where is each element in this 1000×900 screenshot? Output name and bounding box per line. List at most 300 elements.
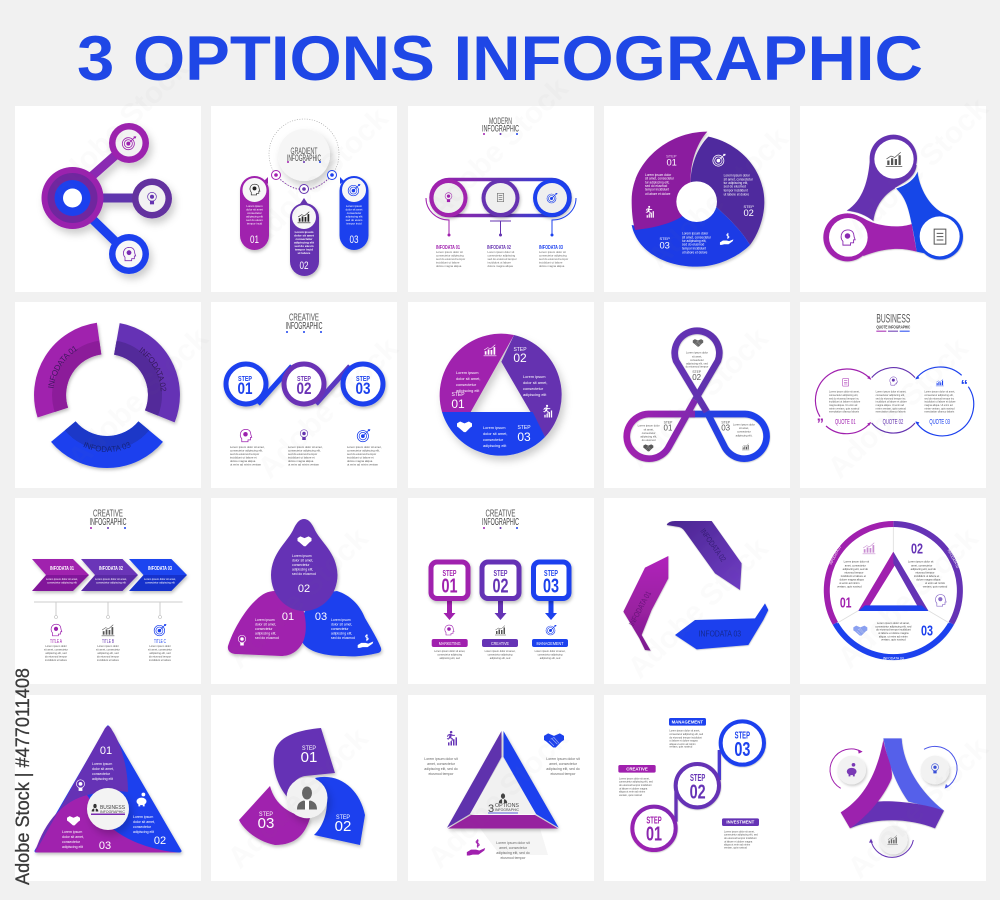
icon: target — [122, 136, 136, 150]
lorem text: consectetur adipiscing elit, sed — [669, 733, 704, 736]
panel: three blades with person — [211, 695, 397, 881]
lorem text: Lorem ipsum dolor sit amet, — [619, 777, 650, 780]
lorem text: incididunt ut labore — [436, 260, 460, 264]
lorem text: adipiscing elit, sed do — [424, 767, 458, 771]
lorem text: Lorem ipsum dolor sit amet, — [230, 445, 265, 449]
center label: INFOGRAPHIC — [100, 809, 125, 814]
icon: handshake — [853, 626, 867, 636]
panel: chevron process: Lorem ipsum dolor sit amet, — [144, 577, 176, 581]
petal text: 03 — [315, 611, 327, 623]
loop text: 02 — [692, 373, 702, 382]
central white circle: INFOGRAPHIC — [287, 153, 321, 163]
lorem text: eiusmod tempor — [550, 772, 576, 776]
loop text: consectetur — [737, 430, 751, 434]
lorem text: amet, consectetur — [845, 563, 866, 567]
central white circle: GRADIENT — [290, 146, 318, 156]
icon: hand dollar — [467, 839, 485, 856]
title: 3 OPTIONS INFOGRAPHIC — [77, 24, 923, 94]
step labels: STEP — [646, 815, 662, 826]
watermark: adobe stock: Adobe Stock — [622, 322, 775, 475]
panel: swirl donut: sed do eiusmod — [724, 185, 746, 189]
panel: ascending step rings: MANAGEMENT — [672, 719, 703, 724]
panel heading — [90, 508, 126, 529]
lorem text: veniam, quis nostrud — [923, 584, 948, 588]
lorem text: Lorem ipsum dolor sit — [908, 560, 934, 564]
quote mark left: ” — [817, 416, 824, 432]
panel: three petals — [211, 498, 397, 684]
lorem text: sed do eiusmod tempor — [539, 257, 568, 261]
loop text: adipiscing elit, sed — [686, 362, 708, 366]
loop text: sit amet, — [692, 354, 702, 358]
panel: ascending step rings — [604, 695, 790, 881]
lorem text: incididunt ut labore et — [230, 456, 257, 460]
segment text: STEP — [513, 347, 527, 353]
icon: target — [547, 193, 558, 203]
category pills — [432, 639, 568, 647]
lorem text: incididunt ut labore — [45, 658, 67, 662]
lorem text: Lorem ipsum dolor sit — [844, 560, 869, 564]
lorem text: incididunt ut labore et — [914, 574, 940, 578]
pill 01: consectetur — [247, 211, 262, 215]
lorem text: ut labore et dolore magna — [619, 787, 648, 790]
lobe: blue — [896, 171, 963, 260]
lorem text: sed do eiusmod tempor inc — [829, 397, 860, 400]
icon: monitor — [936, 379, 944, 386]
lorem text — [434, 650, 566, 660]
lorem text: Lorem ipsum dolor sit amet, — [347, 445, 382, 449]
step labels: 03 — [734, 738, 750, 761]
panel heading — [286, 312, 322, 333]
segment text: adipiscing elit — [62, 845, 83, 849]
lorem text: adipiscing elit, sed — [540, 657, 561, 660]
icon: runner — [646, 206, 654, 218]
step labels: STEP — [336, 814, 350, 821]
step 01 pin: 01 — [442, 576, 458, 598]
quote labels — [835, 419, 950, 426]
lorem text: Lorem ipsum dolor sit amet, — [877, 621, 910, 625]
icon: handshake — [67, 816, 80, 825]
lorem text: incididunt ut labore — [539, 260, 563, 264]
lorem text: magna aliqua. Ut enim ad — [876, 404, 905, 407]
lorem text: dolore magna aliqua — [288, 459, 314, 463]
step labels: STEP — [238, 374, 252, 383]
lorem text: ut enim ad minim veniam — [230, 462, 262, 466]
lorem text: aliqua ut enim ad minim — [669, 743, 696, 746]
titles: TITLE A — [50, 639, 62, 645]
loop text: Lorem ipsum dolor — [638, 424, 660, 428]
panel: swirl donut: sed do eiusmod — [682, 243, 705, 247]
titles: TITLE B — [102, 639, 114, 645]
lorem text — [837, 560, 948, 642]
lorem text: adipiscing elit, sed do — [546, 767, 580, 771]
lorem text: ut enim ad minim veniam — [288, 462, 320, 466]
panel: ascending step rings: INVESTMENT — [726, 820, 755, 825]
panel: swirl donut: ut labore et dolore — [724, 193, 749, 197]
step 03 pin: STEP — [544, 569, 558, 578]
lorem text: Lorem ipsum dolor sit amet, — [288, 445, 323, 449]
labels: INFODATA 02 — [487, 245, 511, 251]
petal text: dolor sit amet, — [255, 622, 276, 626]
lorem text: consectetur adipiscing elit, — [829, 394, 858, 397]
numbers: 03 — [921, 623, 933, 639]
lorem text: consectetur adipiscing elit, sed — [875, 624, 912, 628]
ring labels: INFODATA 02 — [946, 549, 960, 569]
lorem text: veniam, quis nostrud — [724, 847, 748, 850]
lorem text: do eiusmod tempor — [97, 654, 119, 658]
lorem text: incididunt ut labore et — [841, 574, 866, 578]
lobe: magenta — [823, 213, 917, 261]
panel heading: BUSINESS — [876, 312, 910, 326]
label: infodata 02: INFODATA 02 — [139, 347, 166, 392]
lorem text: consectetur adipiscing elit, sed — [619, 781, 653, 784]
pill 01: adipiscing elit — [246, 214, 263, 218]
step labels: 01 — [238, 380, 252, 398]
panel: folded ribbons — [604, 498, 790, 684]
loop text: consectetur — [642, 431, 656, 435]
petal text: 01 — [282, 611, 294, 623]
panel heading: INFOGRAPHIC — [482, 517, 519, 528]
icon: chart — [742, 444, 749, 450]
lorem text: eiusmod tempor — [428, 772, 454, 776]
panel: triangle with three options — [408, 695, 594, 881]
lorem text: minim veniam, quis nostrud — [924, 407, 955, 410]
lorem text: veniam, quis nostrud — [837, 584, 862, 588]
segment text: Lorem ipsum — [456, 370, 478, 375]
icon: tool — [693, 339, 703, 347]
panel: swirl donut — [604, 106, 790, 292]
panel: chevron process: INFODATA 03 — [148, 566, 172, 572]
step labels: 01 — [301, 749, 317, 766]
lorem text: dolore magna aliqua — [916, 578, 941, 582]
step 02 pin: 02 — [492, 576, 508, 598]
pill 02: adipiscing elit — [294, 240, 314, 244]
petal text: dolor sit amet, — [292, 558, 313, 562]
lorem text: Lorem ipsum dolor sit amet, — [434, 650, 465, 653]
panel: chevron process: consectetur adipiscing elit — [47, 580, 77, 584]
panel: swirl donut: Lorem ipsum dolor — [682, 232, 708, 236]
panel heading — [876, 312, 911, 332]
panel: swirl donut: Lorem ipsum dolor — [645, 173, 671, 177]
panel heading: CREATIVE — [93, 508, 123, 520]
icon: target — [154, 624, 166, 636]
segment text: 02 — [513, 351, 527, 365]
lorem text: do eiusmod tempor — [149, 654, 171, 658]
panel: swirl donut: tur adipiscing elit, — [645, 180, 670, 184]
lorem text: dolore magna aliqua — [230, 459, 256, 463]
quote labels: QUOTE 03 — [929, 419, 950, 426]
loop text: consectetur — [690, 358, 704, 362]
lorem text: Lorem ipsum dolor sit amet, — [669, 730, 700, 733]
pill 01: dolor sit amet — [246, 208, 263, 212]
segment text — [62, 745, 166, 852]
lorem text: incididunt ut labore et — [347, 456, 374, 460]
panel: swirl donut: tur adipiscing elit, — [682, 239, 707, 243]
panel: hub with three nodes — [15, 106, 201, 292]
watermark: adobe stock: Adobe Stock — [842, 92, 995, 245]
ribbon: infodata 02: INFODATA 02 — [698, 527, 728, 564]
segment text: Lorem ipsum — [483, 425, 506, 430]
icon: head — [445, 625, 454, 635]
petal text: Lorem ipsum — [255, 618, 275, 622]
lorem text: consectetur adipiscing elit, — [230, 448, 263, 452]
icon: handshake — [544, 733, 564, 748]
petal text: consectetur — [255, 627, 273, 631]
category pills: MANAGEMENT — [536, 641, 564, 646]
segment text: dolor sit amet, — [133, 820, 155, 824]
lorem text — [436, 250, 568, 268]
lorem text: adipiscing elit, sed do — [496, 851, 530, 855]
panel: swirl donut: tempor incididunt — [682, 246, 706, 250]
watermark: adobe stock: Adobe Stock — [422, 72, 575, 225]
segment text: adipiscing elit — [483, 443, 507, 448]
loop text: Lorem ipsum dolor — [733, 422, 755, 426]
watermark: adobe stock: Adobe Stock — [222, 722, 375, 875]
icon: bulb — [445, 193, 452, 202]
lorem text: adipiscing elit, sed — [149, 651, 171, 655]
segment text: Lorem ipsum — [523, 374, 546, 379]
lorem text: consectetur adipiscing elit, — [924, 394, 954, 397]
lorem text: minim veniam, quis nostrud — [829, 407, 860, 410]
segment text: consectetur — [62, 840, 81, 844]
step labels: STEP — [690, 773, 706, 784]
petal text: consectetur — [292, 563, 310, 567]
loop text: do eiusmod tempor — [686, 365, 708, 369]
panel heading: INFOGRAPHIC — [482, 124, 519, 134]
lobe: violet — [847, 135, 917, 222]
lorem text: sed do eiusmod tempor inc — [876, 397, 906, 400]
panel: ring with triangle — [800, 498, 986, 684]
central white circle — [278, 129, 330, 181]
segment text: adipiscing elit — [133, 830, 154, 834]
pill 03 — [340, 176, 368, 250]
panel: swirl donut: sed do eiusmod — [645, 184, 668, 188]
lorem text: Lorem ipsum dolor sit — [539, 250, 566, 254]
panel: chevron process — [15, 498, 201, 684]
step 02 pin: STEP — [494, 569, 508, 578]
panel: chevron process: consectetur adipiscing elit — [145, 580, 175, 584]
lorem text: Lorem ipsum dolor sit — [424, 757, 458, 761]
loop text: adipiscing elit, — [640, 435, 657, 439]
panel: chevron process: consectetur adipiscing elit — [96, 580, 126, 584]
icon: chart — [484, 345, 496, 356]
numbers: 02 — [911, 542, 923, 558]
icon: runner — [447, 731, 457, 746]
pill 02: ut labore — [298, 251, 311, 255]
segment text: Lorem ipsum — [133, 815, 153, 819]
lorem text: dolore magna aliqua — [539, 264, 565, 268]
lorem text: consectetur adipiscing elit, sed — [724, 834, 758, 837]
panel: swirl donut: ut labore et dolore — [645, 192, 671, 196]
lorem text: veniam, quis nostrud — [669, 746, 693, 749]
step 03 pin: 03 — [543, 576, 559, 598]
ribbon: infodata 01: INFODATA 01 — [627, 589, 653, 628]
panel: swirl donut: 02 — [743, 208, 754, 218]
panel: three lobed connector — [800, 106, 986, 292]
pill 03: 03 — [350, 234, 358, 246]
loop text: sit amet, — [739, 426, 749, 430]
lorem text: amet, consectetur — [911, 563, 932, 567]
icon: bulb — [148, 192, 156, 204]
icon: piggy bank — [847, 763, 857, 776]
icon: head — [841, 230, 855, 245]
icon: hand dollar — [720, 233, 733, 245]
icon: piggy bank — [136, 793, 146, 806]
step labels: STEP — [302, 745, 316, 752]
lorem text: exercitation ullamco laboris — [876, 411, 906, 414]
icon: phone chart — [497, 193, 504, 202]
panel heading: CREATIVE — [486, 508, 516, 520]
pill 03: dolor sit amet — [346, 208, 363, 212]
icon: chart — [887, 835, 898, 844]
lorem text: consectetur adipiscing — [538, 654, 563, 656]
lorem text: Lorem ipsum dolor — [149, 644, 171, 648]
panel: circle with triangle cut-out — [408, 302, 594, 488]
panel: swirl donut: sit amet, consectetur — [724, 177, 753, 181]
segment text: consectetur — [133, 825, 152, 829]
lorem text: consectetur adipiscing — [539, 254, 567, 258]
panel: swirl donut: tempor incididunt — [645, 188, 669, 192]
category pills: CREATIVE — [491, 641, 509, 646]
icon: bulb — [300, 430, 308, 440]
lorem text: consectetur adipiscing elit, — [288, 448, 321, 452]
lorem text: amet, consectetur — [549, 762, 578, 766]
lorem text: consectetur adipiscing — [488, 254, 516, 258]
icon: handshake — [457, 422, 472, 432]
segment text: consectetur — [523, 386, 544, 391]
lorem text: aliqua. ut enim ad minim — [879, 634, 909, 638]
lorem text: Lorem ipsum dolor sit — [488, 250, 514, 254]
lorem text: consectetur adipiscing — [436, 254, 464, 258]
icon: runner — [543, 405, 552, 418]
segment text: STEP — [451, 392, 465, 398]
lorem text: do eiusmod tempor incididunt — [724, 837, 757, 840]
chevrons — [32, 559, 187, 591]
pill 01: 01 — [250, 234, 259, 246]
lorem text: minim veniam, quis nostrud — [876, 407, 907, 410]
lorem text: exercitation ullamco laboris — [924, 411, 955, 414]
icon: target — [546, 625, 556, 635]
step labels: 01 — [646, 823, 662, 846]
loop text: 03 — [721, 423, 731, 432]
panel heading — [482, 508, 519, 529]
petal text: consectetur — [331, 627, 349, 631]
panel: chevron process: INFODATA 02 — [99, 566, 123, 572]
lorem text: sed do eiusmod tempor — [436, 257, 465, 261]
segment text: consectetur — [456, 382, 477, 387]
titles — [50, 639, 166, 645]
loop text: sit amet, — [644, 427, 654, 431]
icon: head — [890, 377, 897, 385]
segment text: consectetur — [483, 437, 504, 442]
panel heading — [482, 116, 519, 135]
titles: TITLE C — [154, 639, 166, 645]
ribbon: infodata 03: INFODATA 03 — [699, 630, 741, 639]
icon: bulb — [238, 635, 246, 646]
segment text: dolor sit amet, — [456, 376, 480, 381]
panel: creative infographic step rings — [211, 302, 397, 488]
lorem text: eiusmod tempor — [500, 856, 526, 860]
labels — [436, 245, 563, 251]
lorem text: ut labore et dolore magna — [724, 840, 753, 843]
icon: head — [240, 429, 252, 442]
loop text: STEP — [692, 370, 702, 374]
ribbon: infodata 03 — [675, 603, 768, 649]
lorem text: eiusmod tempor — [915, 571, 935, 575]
lorem text: ut labore et dolore magna — [878, 631, 909, 635]
lorem text: Lorem ipsum dolor sit amet, — [485, 650, 516, 653]
lorem text: sed do eiusmod tempor — [288, 452, 317, 456]
lorem text: incididunt ut labore — [97, 658, 119, 662]
lorem text: consectetur adipiscing — [437, 654, 463, 656]
center label — [91, 804, 126, 815]
panel: trefoil loop — [604, 302, 790, 488]
icon: handshake — [298, 536, 312, 546]
petal text: Lorem ipsum — [292, 554, 312, 558]
step 01 pin — [431, 562, 468, 620]
panel: business quote infographic — [800, 302, 986, 488]
lorem text: Lorem ipsum dolor sit — [436, 250, 463, 254]
labels: INFODATA 01 — [436, 245, 460, 251]
pill 01: sed do eiusm — [246, 218, 263, 222]
icon: head — [51, 624, 62, 636]
center label: OPTIONS — [495, 803, 520, 809]
lorem text: do eiusmod tempor incididunt — [669, 736, 702, 739]
panel: swirl donut: 03 — [659, 240, 670, 250]
lorem text: magna aliqua. Ut enim ad — [924, 404, 953, 407]
icon: handshake — [643, 444, 653, 451]
panel: swirl donut: sit amet, consectetur — [645, 177, 674, 181]
center label — [488, 793, 520, 815]
step labels: 02 — [335, 818, 351, 835]
lorem text: magna aliqua. Ut enim ad — [829, 404, 858, 407]
lorem text: exercitation ullamco laboris — [829, 411, 860, 414]
segment text: 01 — [451, 397, 465, 411]
loop text: Lorem ipsum dolor — [686, 351, 708, 355]
pill 03: tempor incid — [346, 222, 362, 226]
lorem text: ut enim ad minim — [925, 581, 946, 585]
ring labels — [829, 545, 960, 660]
pill 02 — [290, 198, 319, 276]
segment text: dolor sit amet, — [523, 380, 547, 385]
step labels: STEP — [735, 731, 750, 742]
lorem text: veniam, quis nostrud — [881, 638, 906, 642]
segment text: adipiscing elit — [456, 388, 480, 393]
segment text: 02 — [154, 835, 166, 847]
lorem text: eiusmod tempor — [844, 571, 864, 575]
loop text: 01 — [664, 423, 673, 432]
icon: person — [297, 786, 317, 810]
petal text: sed do eiusmod — [331, 636, 355, 640]
watermark: adobe stock: Adobe Stock — [42, 52, 195, 205]
panel: swirl donut: STEP — [666, 153, 677, 158]
lorem text — [44, 644, 172, 662]
panel heading: INFOGRAPHIC — [90, 517, 126, 528]
pill 01 — [240, 176, 269, 250]
loop text: STEP — [664, 420, 673, 424]
icon: chart — [886, 152, 902, 166]
lorem text: consectetur adipiscing elit, — [876, 394, 905, 397]
panel: step pins — [408, 498, 594, 684]
lorem text: sed do eiusmod tempor inc — [924, 397, 955, 400]
numbers — [840, 542, 933, 639]
panel heading: QUOTE INFOGRAPHIC — [876, 324, 911, 330]
watermark: adobe stock: Adobe Stock — [622, 532, 775, 685]
pill 01: Lorem ipsum — [246, 204, 263, 208]
stock id vertical label: Adobe Stock | #477011408 — [13, 668, 34, 885]
step 01 pin: STEP — [442, 569, 457, 578]
quote labels: QUOTE 01 — [835, 419, 856, 426]
lorem text: ut labore et dolore magna — [669, 740, 698, 743]
